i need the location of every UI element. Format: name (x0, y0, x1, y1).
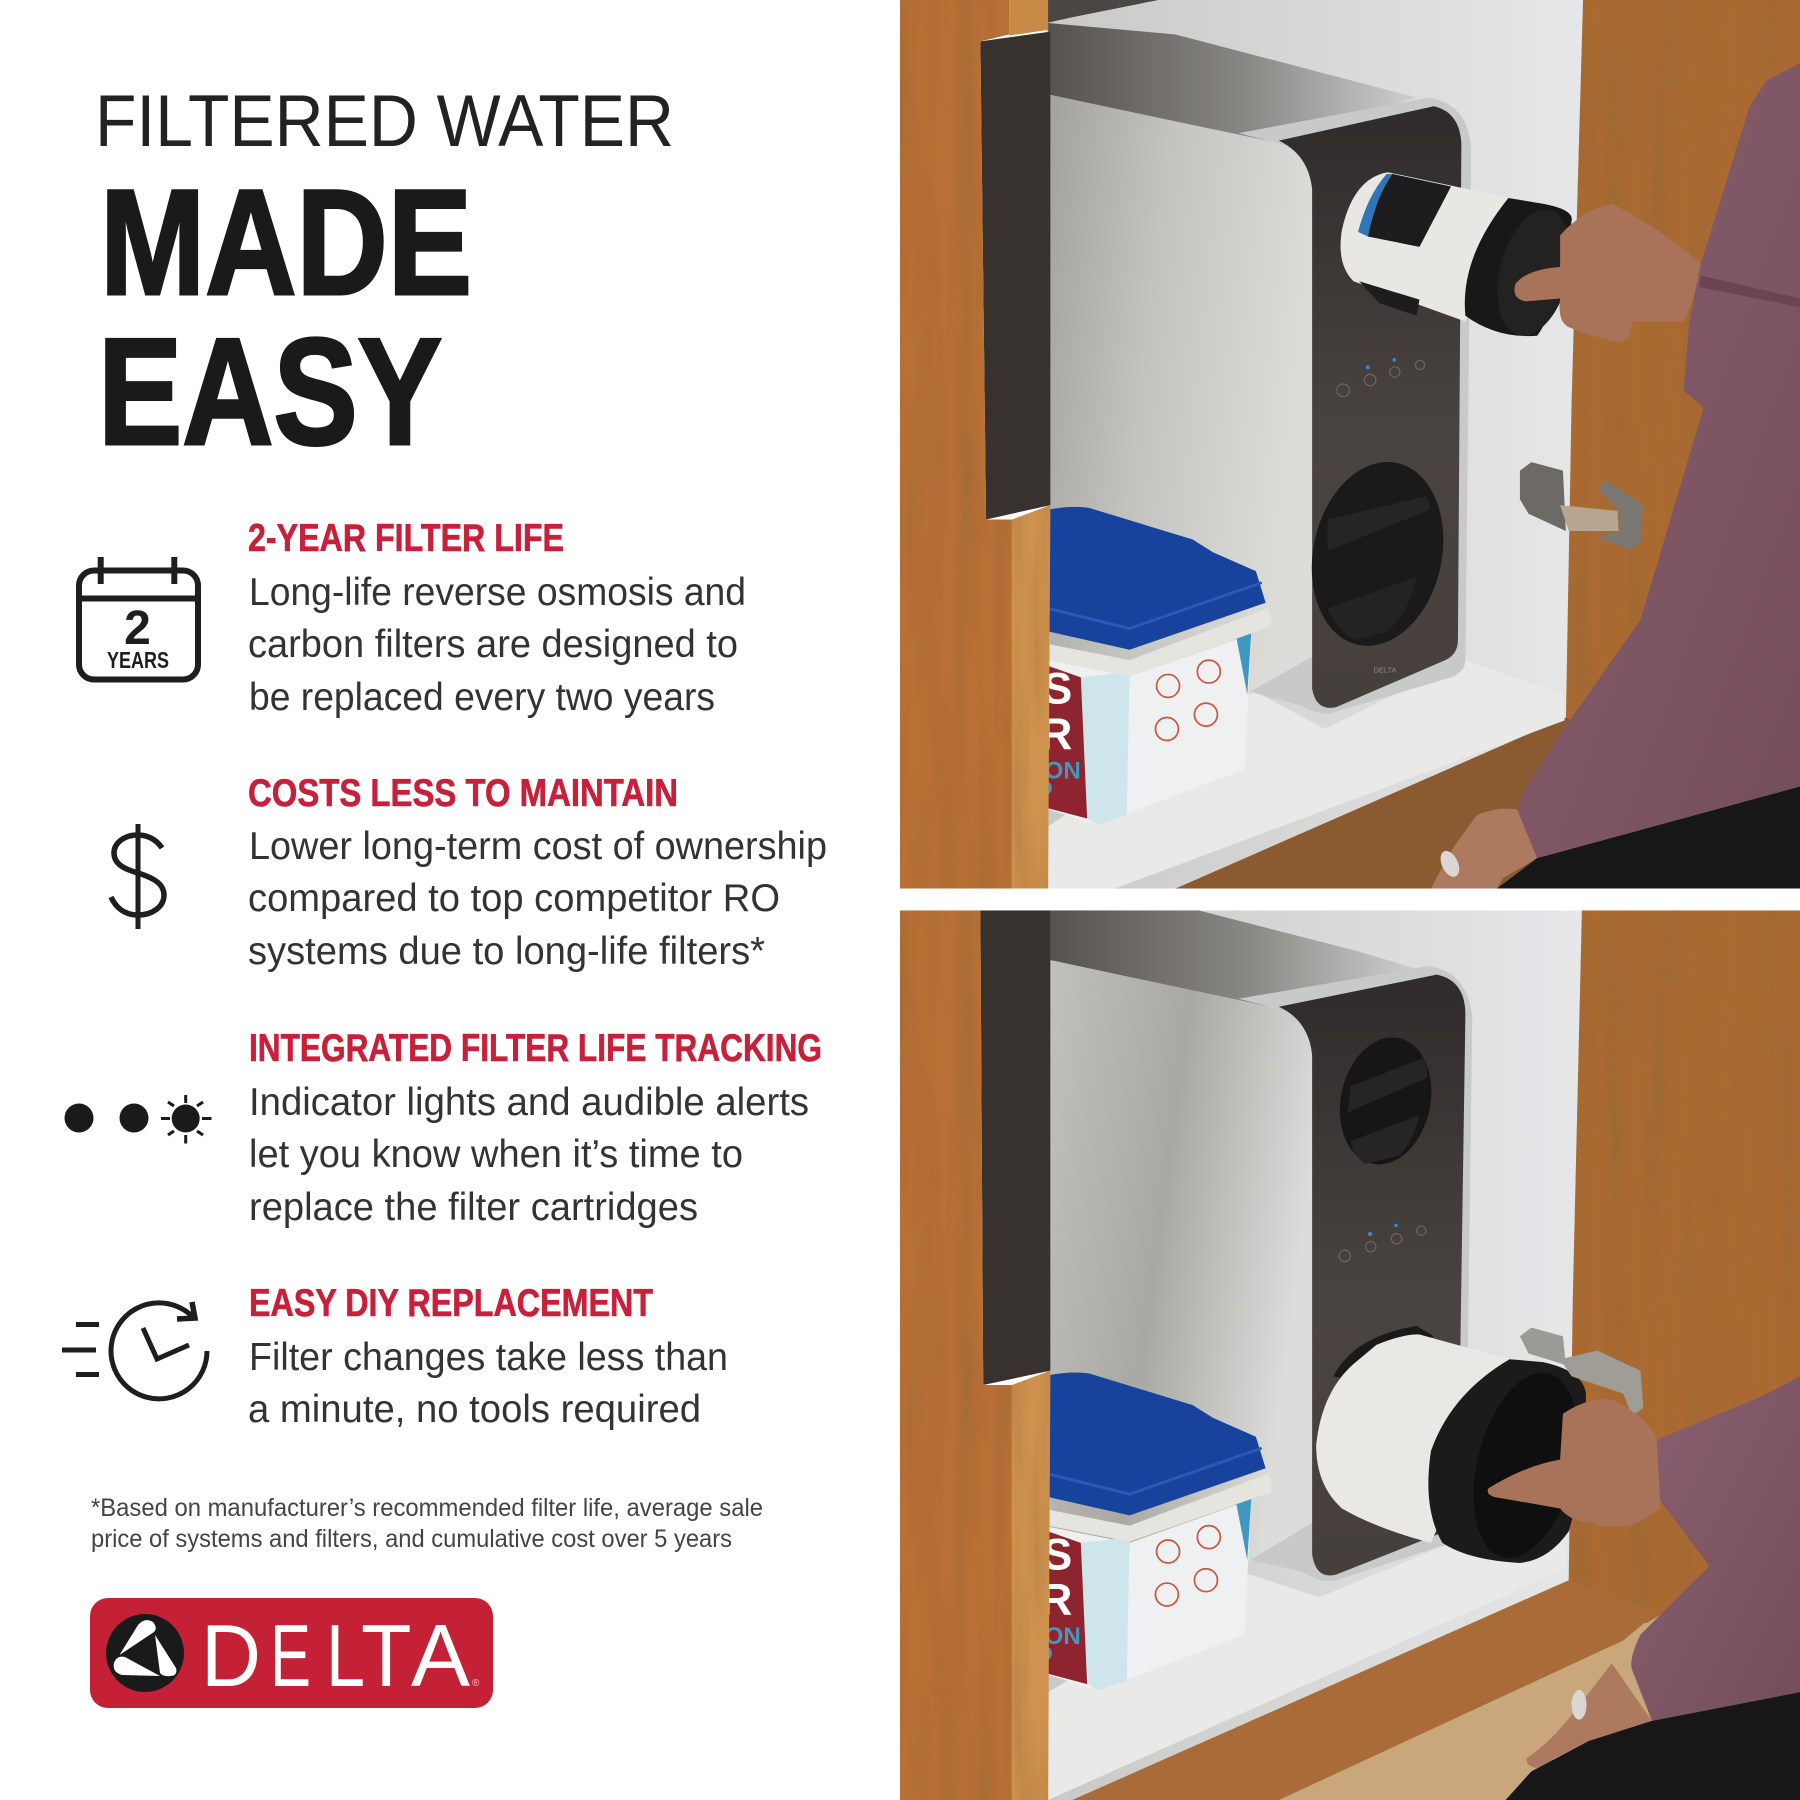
door hinge (1520, 1328, 1643, 1415)
filter unit front (1239, 966, 1472, 1581)
person: hand on filter (1488, 1399, 1661, 1527)
filter unit side panel (1050, 960, 1317, 1560)
feature: integrated filter life tracking: Indicator lights and audible alerts (249, 1081, 809, 1124)
filter unit front (1239, 98, 1471, 714)
icon: indicator lights (64, 1095, 212, 1144)
person: hand on filter (1514, 204, 1701, 342)
ring (1440, 850, 1460, 877)
floor and plinth (1048, 1546, 1658, 1800)
person: arm and hoodie (1631, 1376, 1800, 1721)
photo: filter cartridge being inserted (900, 910, 1800, 1800)
icon: calendar 2 years (79, 557, 198, 680)
blue-lidded storage tub: R (1040, 1575, 1072, 1625)
title: FILTERED WATER (95, 81, 674, 162)
shelf and plinth (1048, 660, 1589, 889)
feature: integrated filter life tracking: let you know when it’s time to (249, 1133, 743, 1176)
filter unit side panel (1050, 94, 1253, 694)
blue-lidded storage tub: D (1038, 777, 1053, 800)
right cabinet door (1566, 0, 1800, 746)
feature: costs less to maintain: Lower long-term cost of ownership (249, 825, 827, 868)
feature: integrated filter life tracking: INTEGRATED FILTER LIFE TRACKING (249, 1027, 822, 1070)
logo: Delta: T (361, 1606, 412, 1705)
filter unit front: DELTA (1374, 666, 1396, 675)
icon: fast clock (62, 1302, 207, 1399)
blue-lidded storage tub: S (1042, 1529, 1072, 1579)
blue-lidded storage tub: R (1040, 709, 1072, 759)
logo: Delta: A (411, 1606, 470, 1705)
feature: costs less to maintain: COSTS LESS TO MAINTAIN (248, 772, 678, 815)
left cabinet door (900, 910, 1050, 1800)
feature: 2-year filter life: be replaced every two years (249, 676, 715, 719)
person: lower hand (1527, 1663, 1652, 1768)
icon: dollar sign (111, 824, 164, 929)
right cabinet door (1569, 910, 1800, 1623)
door hinge (1520, 462, 1643, 550)
title: MADE (100, 158, 472, 326)
cabinet interior (1046, 0, 1586, 889)
footnote: price of systems and filters, and cumulative cost over 5 years (91, 1525, 732, 1553)
left cabinet door (900, 0, 1050, 889)
lower filter knob (1312, 462, 1444, 646)
person: arm and hoodie (1517, 63, 1800, 858)
logo: Delta: E (270, 1606, 311, 1705)
feature: costs less to maintain (248, 772, 827, 973)
inserted filter cartridge (1316, 1326, 1595, 1569)
logo: Delta: L (326, 1606, 365, 1705)
feature: 2-year filter life (248, 517, 746, 719)
feature: costs less to maintain: systems due to long-life filters* (248, 930, 765, 973)
person: dark trousers (1497, 786, 1800, 889)
floor backing (1618, 1614, 1800, 1732)
person: lower hand (1431, 809, 1537, 889)
cabinet interior (1046, 910, 1583, 1800)
title: EASY (98, 307, 442, 477)
title (95, 81, 674, 477)
photo: filter cartridge being removed (900, 0, 1800, 889)
blue-lidded storage tub: ON (1045, 1623, 1081, 1650)
blue-lidded storage tub: ON (1045, 757, 1081, 784)
feature: easy diy replacement: Filter changes take less than (249, 1336, 728, 1379)
person: dark trousers (1506, 1692, 1800, 1800)
blue-lidded storage tub (1038, 1372, 1271, 1690)
feature: 2-year filter life: 2-YEAR FILTER LIFE (248, 517, 564, 560)
feature: easy diy replacement: a minute, no tools required (248, 1388, 701, 1431)
feature: integrated filter life tracking (249, 1027, 822, 1229)
logo: Delta (90, 1598, 493, 1708)
feature: costs less to maintain: compared to top competitor RO (248, 877, 780, 920)
feature: integrated filter life tracking: replace the filter cartridges (249, 1186, 698, 1229)
feature: easy diy replacement: EASY DIY REPLACEMENT (249, 1282, 653, 1325)
icon: calendar 2 years: YEARS (107, 647, 169, 673)
feature: 2-year filter life: Long-life reverse osmosis and (249, 571, 746, 614)
blue-lidded storage tub: S (1042, 664, 1072, 714)
ring (1572, 1690, 1587, 1720)
footnote: *Based on manufacturer’s recommended filter life, average sale (91, 1494, 763, 1522)
logo: Delta: D (201, 1606, 261, 1705)
dark door handle (980, 32, 1050, 519)
filter unit top (1048, 23, 1417, 141)
feature: easy diy replacement (248, 1282, 728, 1431)
blue-lidded storage tub (1038, 507, 1271, 825)
dark door handle (980, 910, 1050, 1385)
pulled-out filter cartridge (1341, 172, 1583, 343)
panel: text column (62, 81, 827, 1708)
icon: calendar 2 years: 2 (124, 602, 151, 655)
footnote (91, 1494, 763, 1553)
logo: Delta: ® (472, 1678, 480, 1689)
blue-lidded storage tub: D (1038, 1643, 1053, 1666)
feature: 2-year filter life: carbon filters are designed to (248, 623, 738, 666)
upper filter knob (1340, 1038, 1432, 1164)
